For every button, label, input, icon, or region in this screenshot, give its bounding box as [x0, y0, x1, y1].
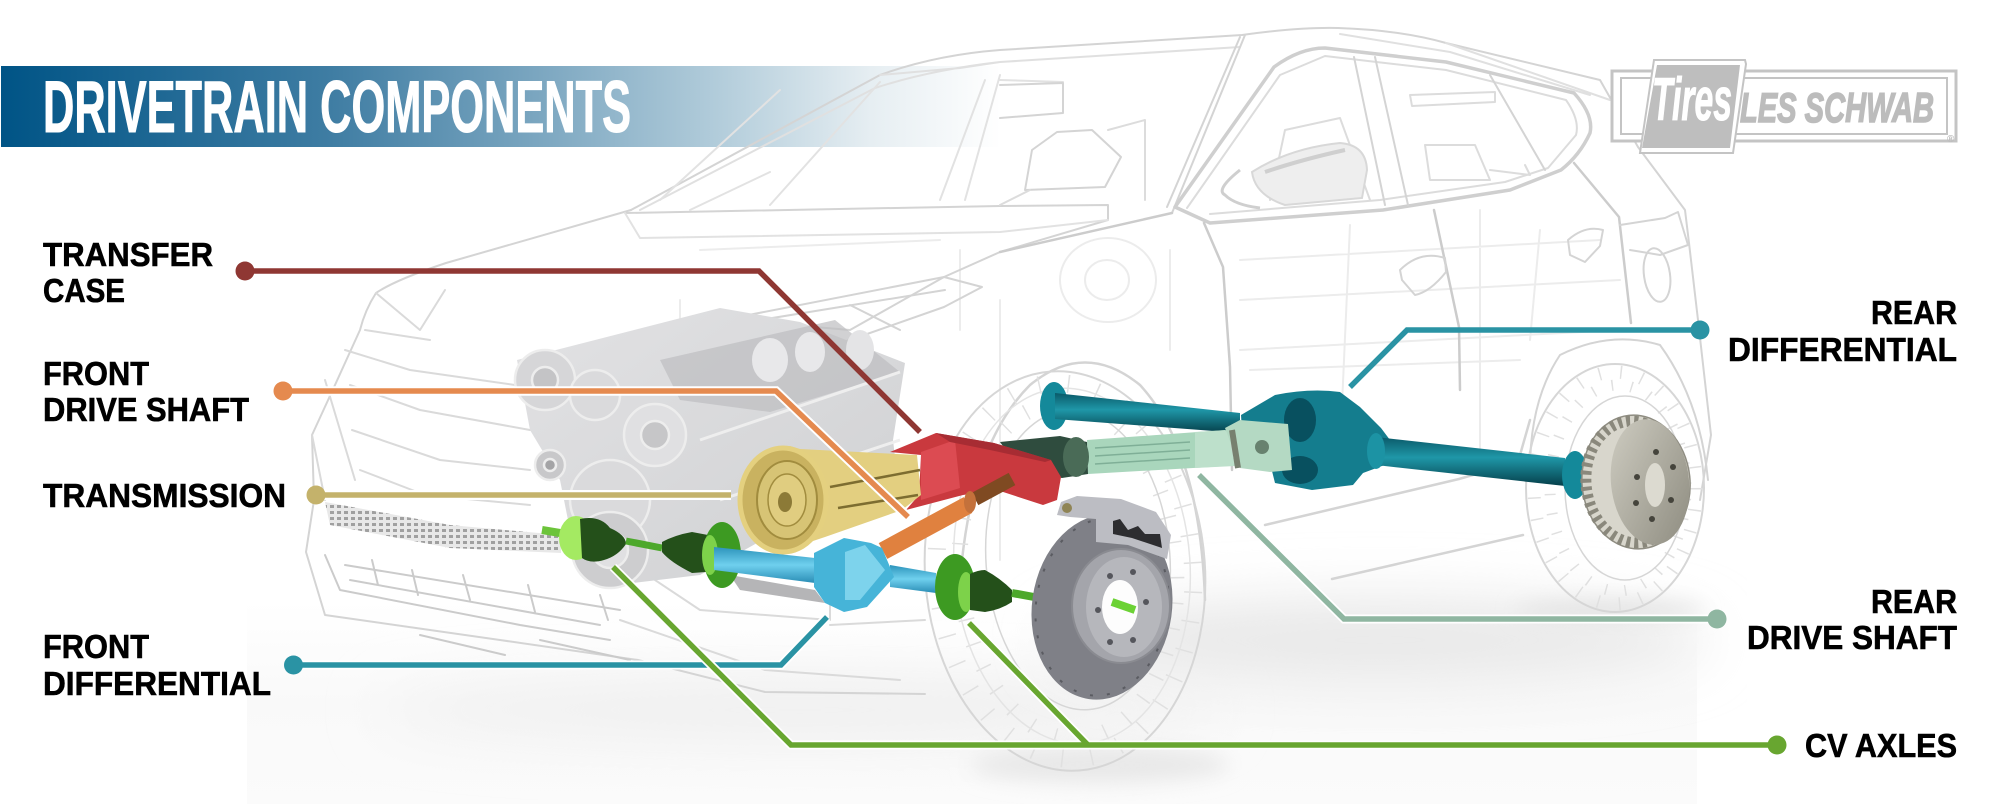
- label: [43, 628, 271, 702]
- transfer boot: [1000, 436, 1089, 478]
- front drive shaft: [883, 479, 1012, 551]
- a-pillar: [1167, 35, 1245, 213]
- transfer case: [890, 433, 1061, 510]
- label: REAR: [1871, 583, 1957, 620]
- label: DIFFERENTIAL: [43, 665, 271, 702]
- label: CV AXLES: [1805, 727, 1957, 764]
- label: REAR: [1871, 294, 1957, 331]
- windshield and dash: [625, 205, 1108, 330]
- front grille bars: [312, 290, 620, 505]
- logo: Les Schwab Tires: [1612, 60, 1956, 153]
- callout: front differential: [43, 617, 827, 702]
- label: DIFFERENTIAL: [1728, 331, 1957, 368]
- title: DRIVETRAIN COMPONENTS: [43, 67, 631, 148]
- label: TRANSFER: [43, 236, 213, 273]
- side window frame: [1175, 48, 1591, 223]
- callout: cv axles: [613, 567, 1957, 764]
- label: DRIVE SHAFT: [43, 391, 249, 428]
- label: FRONT: [43, 628, 149, 665]
- fuel door: [1640, 246, 1674, 304]
- left cv axle: [542, 516, 741, 588]
- sills: [1265, 420, 1530, 579]
- engine: [515, 308, 905, 588]
- right cv axle: [935, 554, 1034, 620]
- front tire: [911, 362, 1219, 780]
- label: [1728, 294, 1957, 368]
- transmission: [740, 446, 921, 552]
- lower bumper: [325, 555, 630, 660]
- tail light: [1620, 212, 1688, 255]
- faint interior ghost lines: [680, 210, 1620, 560]
- rear drive shaft: [1087, 420, 1292, 474]
- rear-view mirror: [1000, 83, 1063, 118]
- callout: transfer case: [43, 236, 920, 432]
- label: [1747, 583, 1957, 656]
- pillars: [1354, 57, 1545, 205]
- label: [43, 236, 213, 309]
- logo: Les Schwab Tires: ®: [1947, 134, 1955, 145]
- label: DRIVE SHAFT: [1747, 619, 1957, 656]
- side mirror: [1222, 143, 1367, 208]
- callout: rear differential: [1350, 294, 1957, 387]
- left flange: [1040, 382, 1068, 430]
- rear seat and interior: [1000, 118, 1530, 205]
- label: CASE: [43, 272, 125, 309]
- car body outline: [631, 28, 1711, 500]
- headlight: [733, 277, 982, 355]
- caliper: [1057, 496, 1171, 559]
- shadow under front axle: [730, 575, 825, 603]
- brake disc: [1020, 496, 1184, 709]
- label: TRANSMISSION: [43, 477, 286, 514]
- door handles: [1400, 229, 1603, 295]
- ground shadow: [402, 588, 1702, 792]
- callout: rear drive shaft: [1199, 475, 1957, 656]
- front seat: [1025, 130, 1121, 190]
- pulleys: [515, 350, 686, 588]
- callout: transmission: [43, 477, 731, 514]
- car line drawing: [306, 28, 1711, 780]
- grille mesh: [325, 502, 561, 553]
- callout: front drive shaft: [43, 355, 908, 517]
- title banner: [1, 66, 1001, 148]
- front wheel arch: [962, 362, 1205, 600]
- rear drum: [1575, 410, 1697, 554]
- label: FRONT: [43, 355, 149, 392]
- rear differential housing: [1241, 391, 1390, 490]
- logo: Les Schwab Tires: Tires: [1652, 66, 1732, 133]
- front differential: [714, 538, 936, 612]
- rear tire: [1526, 364, 1704, 612]
- door lines: [1000, 163, 1631, 470]
- label: [43, 355, 249, 428]
- rear axle: [1040, 382, 1588, 499]
- rear wheel arch: [1530, 339, 1708, 480]
